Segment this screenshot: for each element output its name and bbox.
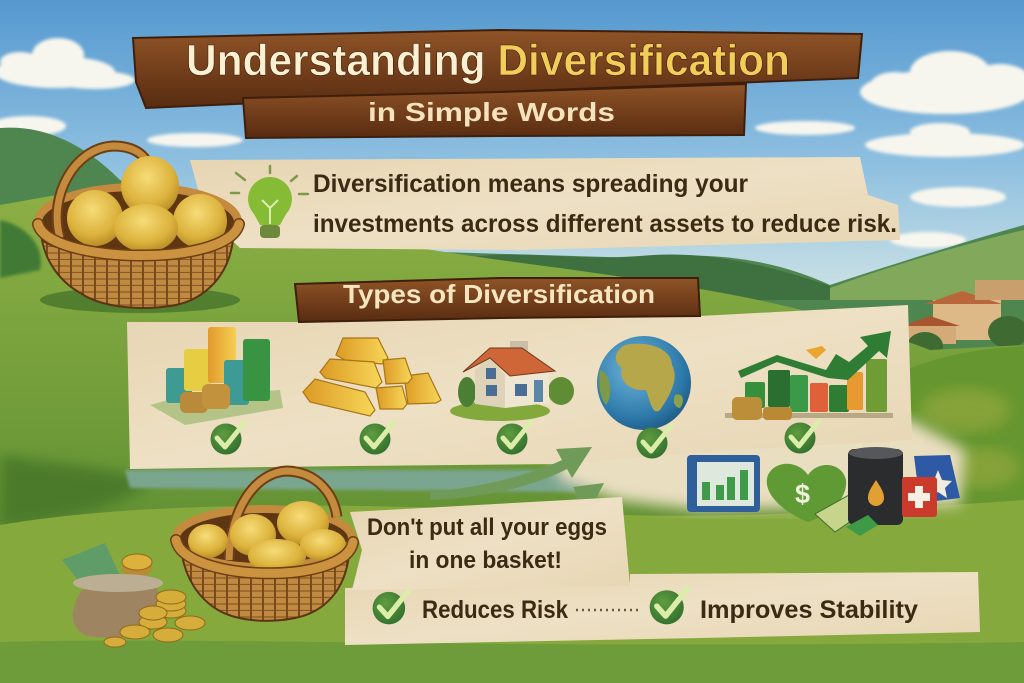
icon: money bag and coins	[62, 543, 205, 647]
title banner	[133, 30, 862, 138]
proverb text	[367, 514, 607, 574]
icon: house	[450, 341, 574, 421]
icon: basket of golden eggs	[38, 146, 240, 313]
panel: types of diversification	[127, 305, 965, 510]
benefit: improves stability: Improves Stability	[700, 596, 918, 624]
icon: gold bars	[303, 338, 441, 416]
icon: green heart	[767, 464, 846, 522]
icon: banknotes	[815, 490, 873, 532]
title main plank	[133, 30, 862, 108]
proverb text: in one basket!	[409, 547, 562, 574]
definition text: investments across different assets to reduce risk.	[313, 210, 897, 238]
definition text	[313, 170, 897, 238]
definition text: Diversification means spreading your	[313, 170, 748, 198]
other assets cluster	[687, 447, 960, 536]
dotted connector	[576, 609, 640, 611]
panel: proverb note	[350, 497, 630, 590]
panel: benefits	[345, 572, 980, 645]
panel: definition	[190, 157, 900, 250]
distant hills	[0, 128, 1024, 420]
benefit: reduces risk: Reduces Risk	[422, 596, 568, 624]
clouds	[0, 38, 1024, 248]
subtitle plank	[243, 84, 746, 138]
section heading plank	[295, 278, 700, 322]
icon: globe	[597, 336, 691, 430]
sky background	[0, 0, 1024, 300]
meadow	[0, 186, 1024, 683]
village on the hill	[903, 280, 1024, 360]
icon: medical card	[902, 477, 937, 517]
icon: dollar sign: $	[795, 479, 810, 509]
icon: check improves stability	[650, 589, 688, 624]
icon: basket with eggs	[176, 471, 353, 621]
icon: market monitor	[687, 455, 760, 512]
icon: stocks bars	[150, 327, 283, 425]
cream fade behind assets	[545, 420, 965, 510]
check marks row	[210, 421, 819, 458]
icon: growth chart	[725, 331, 893, 420]
title text: Understanding Diversification	[186, 36, 790, 85]
icon: star card	[914, 455, 960, 503]
proverb text: Don't put all your eggs	[367, 514, 607, 541]
section heading text: Types of Diversification	[343, 279, 655, 309]
subtitle text: in Simple Words	[368, 97, 615, 127]
stream strip	[125, 470, 610, 492]
arrow: upper green arrow	[430, 447, 592, 500]
icon: check reduces risk	[373, 590, 409, 624]
arrow: lower green arrow	[510, 483, 604, 523]
icon: light bulb	[231, 166, 308, 238]
icon: green note	[846, 515, 878, 536]
icon: oil barrel	[848, 447, 903, 525]
